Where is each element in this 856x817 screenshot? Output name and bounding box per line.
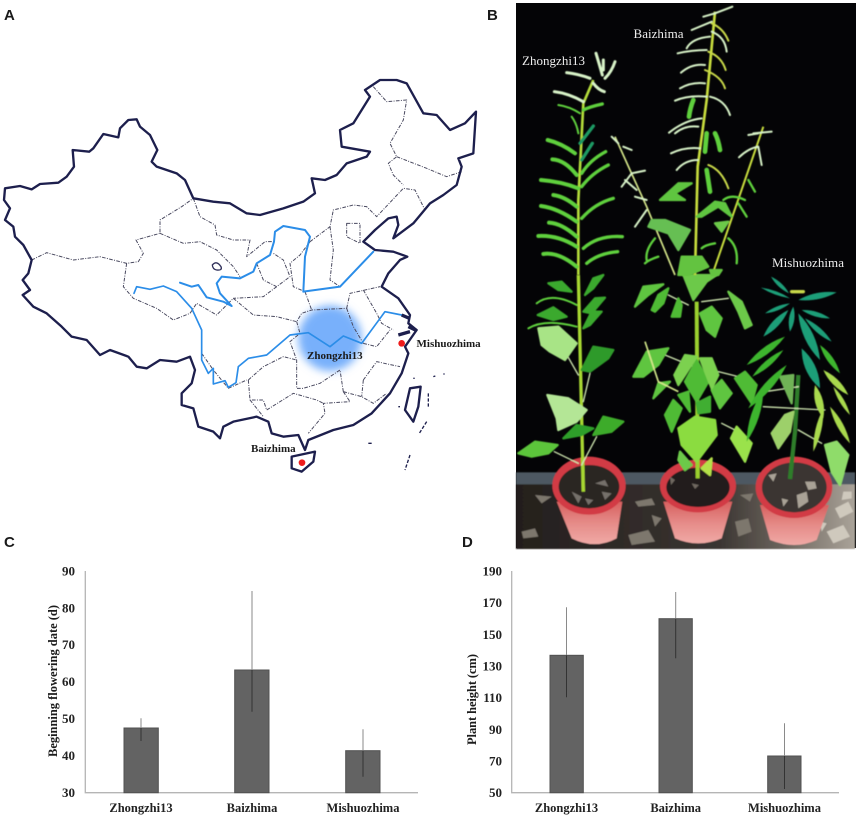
x labels: Zhongzhi13 [535,801,598,815]
upper plants [538,7,772,275]
Qinghai lake [212,263,221,270]
light speckles on right [820,492,853,543]
x labels: Mishuozhima [327,801,400,815]
panel letter C: C [4,534,15,551]
panel letter B: B [487,7,498,24]
bar: Mishuozhima [768,723,801,793]
soil ground [516,484,855,549]
y tick labels: 150 [482,627,502,642]
ground speckles [522,493,753,545]
province boundaries [32,87,462,433]
map label: Baizhima: Baizhima [251,443,296,455]
x labels: Baizhima [650,801,702,815]
map label: Mishuozhima: Mishuozhima [416,338,481,350]
Baizhima right branch [713,127,763,272]
photo label: Mishuozhima: Mishuozhima [772,255,844,270]
photo label: Zhongzhi13: Zhongzhi13 [522,53,585,68]
Yangtze delta coast [398,315,417,335]
chart C: beginning flowering date [46,564,418,815]
y tick labels: 60 [62,674,75,689]
outlying islands [368,374,445,470]
x labels [535,801,822,815]
panel: photo of three plants [516,3,856,549]
panel letter A: A [4,7,15,24]
plant stems lower [578,275,583,492]
Yangtze River [134,286,402,387]
y tick labels: 110 [483,690,502,705]
bar: Baizhima [235,591,269,793]
Baizhima upper stems [695,12,715,275]
y tick labels: 90 [489,722,502,737]
map shapes [4,80,476,472]
x labels [109,801,400,815]
Taiwan island [405,387,421,422]
bar: Zhongzhi13 [124,718,158,793]
y tick labels: 70 [489,754,502,768]
Zhongzhi13 lower leaves [518,275,623,457]
x labels: Baizhima [227,801,278,815]
y tick labels: 90 [62,564,75,578]
y tick labels: 170 [482,595,502,610]
photo label: Baizhima: Baizhima [634,26,684,41]
national border [4,80,476,450]
bar: Mishuozhima [346,729,380,793]
y tick labels: 190 [482,564,502,578]
Yellow River [180,226,373,306]
y axis title: Beginning flowering date (d) [46,605,60,757]
x labels: Zhongzhi13 [109,801,173,815]
y tick labels: 70 [62,637,75,652]
x labels: Mishuozhima [748,801,822,815]
bar: Zhongzhi13 [550,607,583,793]
bar: Baizhima [659,592,692,793]
panel: map of China [4,80,481,472]
Baizhima upper leaves [612,7,772,227]
y tick labels: 40 [62,748,75,763]
highlighted region: Zhongzhi13 area [298,306,362,371]
y axis title: Plant height (cm) [465,654,479,745]
y tick labels: 30 [62,785,75,800]
y tick labels: 130 [482,658,502,674]
photo background [516,3,856,548]
Baizhima left branch [615,137,675,275]
Mishuozhima leaves [735,277,850,485]
ground strip [516,472,855,488]
Baizhima lower leaves [633,275,752,475]
y tick labels: 50 [62,711,75,726]
Hainan island [292,452,315,472]
Zhongzhi13 upper stem [578,80,593,275]
y tick labels: 50 [489,785,502,800]
y tick labels [62,564,75,800]
Mishuozhima stem [790,375,798,479]
y tick labels [482,564,502,800]
ground and pots [516,275,855,549]
Zhongzhi13 upper leaves [538,53,622,267]
panel letter D: D [462,534,473,551]
map label: Zhongzhi13: Zhongzhi13 [307,350,363,362]
axes [512,571,839,793]
pot 3 [756,457,832,545]
chart D: plant height [465,564,839,815]
location dot: Baizhima [299,459,305,466]
pot 2 [660,460,736,543]
pot 1 [552,457,626,544]
petioles [554,295,825,465]
Baizhima main stem lower [697,302,698,478]
axes [85,571,418,793]
location dot: Mishuozhima [398,340,405,347]
Baizhima middle leaves [645,183,737,275]
y tick labels: 80 [62,600,75,616]
